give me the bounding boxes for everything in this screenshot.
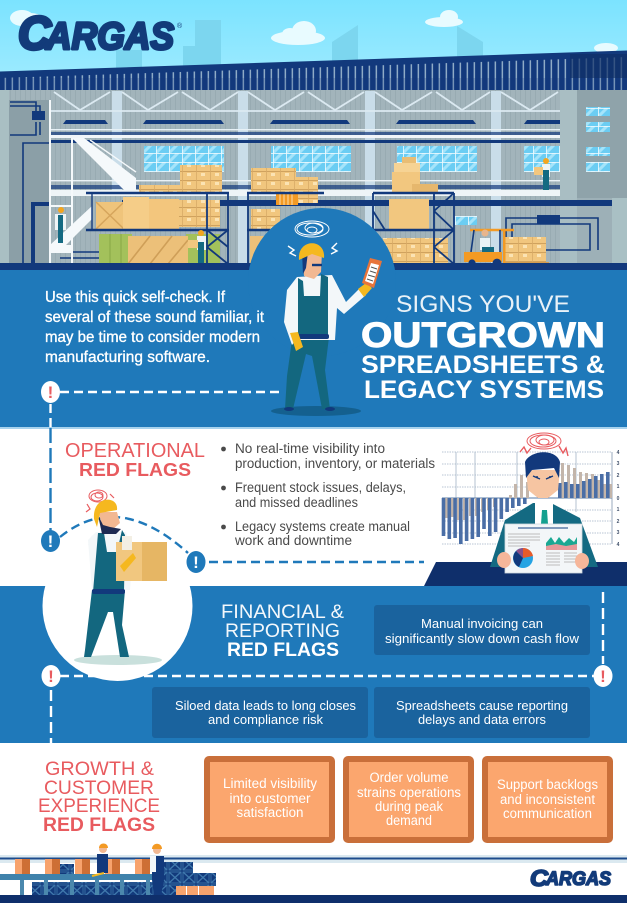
logo: Cargas footer: C	[530, 865, 548, 891]
panel: financial blue band	[0, 562, 627, 743]
heading: financial and reporting red flags: REPORTING	[225, 621, 340, 642]
intro text: manufacturing software.	[45, 349, 210, 366]
legs	[285, 337, 330, 409]
card: siloed data: Siloed data leads to long closes	[175, 698, 356, 713]
card: siloed data	[152, 687, 368, 738]
stairs	[50, 100, 136, 265]
card: limited visibility	[207, 759, 332, 840]
card: manual invoicing	[374, 605, 590, 655]
orange boxes	[15, 859, 214, 897]
card: limited visibility: Limited visibility	[223, 776, 317, 791]
card: spreadsheets reporting: Spreadsheets cause reporting	[396, 698, 568, 713]
heading: growth and customer experience red flags: GROWTH &	[45, 759, 154, 780]
panel: header blue band	[0, 208, 627, 428]
shelving rack and goods right	[373, 157, 454, 267]
workers	[92, 844, 164, 896]
heading: operational red flags	[65, 440, 205, 480]
icon: alert marker operational left: !	[48, 532, 53, 551]
icon: alert marker financial right	[594, 665, 612, 687]
heading: financial and reporting red flags	[221, 602, 344, 661]
sky with clouds and skyline	[0, 0, 627, 95]
chart: bar chart behind businessman: 2	[617, 519, 620, 525]
title: OUTGROWN	[361, 316, 605, 355]
title: LEGACY SYSTEMS	[364, 376, 604, 404]
chart: bar chart behind businessman: 3	[617, 461, 620, 467]
card: manual invoicing: Manual invoicing can	[421, 616, 543, 631]
card: manual invoicing: significantly slow down cash flow	[385, 631, 580, 646]
icon: alert marker financial left: !	[48, 667, 54, 686]
head	[302, 252, 322, 279]
list: operational bullets: Frequent stock issues, delays,	[235, 480, 406, 495]
shirt	[88, 532, 132, 590]
icon: alert marker financial right: !	[600, 667, 606, 686]
heading: growth and customer experience red flags: CUSTOMER	[44, 778, 154, 799]
icon: alert marker operational right	[186, 551, 206, 573]
icon: alert marker operational left	[41, 530, 60, 552]
heading: financial and reporting red flags: FINANCIAL &	[221, 602, 344, 623]
columns	[112, 91, 501, 265]
report	[505, 524, 582, 573]
logo: Cargas footer: ARGAS	[545, 869, 611, 890]
chart: bar chart behind businessman: 0	[617, 496, 620, 502]
card: support backlogs: Support backlogs	[497, 777, 598, 792]
logo: Cargas top: ARGAS	[45, 16, 174, 58]
heading: operational red flags: RED FLAGS	[79, 459, 191, 480]
jacket	[490, 503, 598, 567]
chart: bar chart behind businessman: 2	[617, 473, 620, 479]
stress scribble	[288, 221, 337, 256]
hands	[497, 552, 511, 568]
legs	[84, 590, 129, 657]
list: operational bullets: production, inventory, or materials	[235, 456, 435, 471]
intro text: Use this quick self-check. If	[45, 289, 226, 306]
card: support backlogs: communication	[503, 806, 592, 821]
pie chart	[513, 548, 533, 568]
windows	[144, 107, 610, 225]
intro text	[45, 289, 265, 366]
roof	[0, 50, 627, 90]
conveyor belt	[0, 874, 152, 880]
list: operational bullets: and missed deadlines	[235, 495, 358, 510]
chart: bar chart behind businessman: 1	[617, 507, 620, 513]
logo: Cargas top: ®	[177, 22, 183, 30]
overalls	[298, 274, 328, 338]
title	[361, 291, 605, 404]
card: order volume: demand	[386, 813, 432, 828]
overalls	[93, 530, 125, 592]
list: operational bullets: Legacy systems create manual	[235, 519, 410, 534]
icon: alert marker operational right: !	[193, 553, 199, 572]
heading: growth and customer experience red flags: RED FLAGS	[43, 815, 155, 836]
footer: conveyor scene	[0, 844, 627, 903]
card: order volume	[346, 759, 471, 840]
card: order volume: Order volume	[370, 770, 448, 785]
lower walkway	[50, 180, 612, 206]
chart: bar chart behind businessman	[442, 450, 620, 548]
trusses	[50, 92, 560, 111]
small workers	[55, 158, 550, 264]
card: spreadsheets reporting: delays and data errors	[418, 712, 546, 727]
heading: growth and customer experience red flags: EXPERIENCE	[38, 796, 160, 817]
icon: alert marker intro	[41, 381, 60, 403]
shelving rack and goods left	[86, 165, 229, 267]
character: stressed worker with clipboard	[271, 221, 382, 416]
chart: bar chart behind businessman: 1	[617, 484, 620, 490]
floor	[0, 263, 627, 270]
card: order volume: during peak	[375, 799, 443, 814]
chart: bar chart behind businessman: 4	[617, 542, 620, 548]
card: support backlogs	[485, 759, 610, 840]
navy crate stacks	[32, 862, 216, 895]
head	[526, 470, 560, 498]
shirt and arms	[284, 275, 366, 345]
card: siloed data: and compliance risk	[208, 712, 323, 727]
title: SPREADSHEETS &	[361, 351, 605, 379]
list: operational bullets	[221, 441, 435, 548]
clipboard	[362, 258, 382, 288]
chart: bar chart behind businessman: 4	[617, 450, 620, 456]
chart: bar chart behind businessman: 3	[617, 530, 620, 536]
forklift with boxes	[464, 229, 549, 267]
logo: Cargas top: C	[18, 7, 52, 59]
character: worker carrying box	[74, 490, 167, 665]
white oval behind worker	[42, 531, 192, 681]
intro text: may be time to consider modern	[45, 329, 260, 346]
shelving rack and goods middle	[247, 168, 324, 265]
lamps	[63, 120, 560, 124]
list: operational bullets: work and downtime	[234, 533, 352, 548]
connector: dashed path	[50, 392, 603, 743]
building wall	[0, 90, 627, 265]
card: limited visibility: into customer	[230, 791, 311, 806]
list: operational bullets: No real-time visibility into	[235, 441, 385, 456]
head	[98, 512, 120, 530]
logo: Cargas top	[18, 7, 183, 59]
card: spreadsheets reporting	[374, 687, 590, 738]
heading: operational red flags: OPERATIONAL	[65, 440, 205, 462]
card: order volume: strains operations	[357, 785, 461, 800]
heading: growth and customer experience red flags	[38, 759, 160, 836]
character: businessman with report	[490, 433, 598, 573]
heading: financial and reporting red flags: RED FLAGS	[227, 640, 339, 661]
navy floor	[0, 895, 627, 903]
logo: Cargas footer	[530, 865, 611, 891]
red scribble	[520, 433, 568, 456]
icon: alert marker intro: !	[48, 383, 53, 402]
box	[116, 536, 167, 581]
card: limited visibility: satisfaction	[236, 805, 304, 820]
title: SIGNS YOU'VE	[396, 291, 570, 318]
intro text: several of these sound familiar, it	[45, 309, 265, 326]
upper walkway	[50, 129, 560, 143]
pipes	[10, 102, 598, 265]
warehouse illustration	[0, 50, 627, 270]
icon: alert marker financial left	[42, 665, 60, 687]
red scribble	[86, 490, 114, 512]
card: support backlogs: and inconsistent	[500, 792, 595, 807]
